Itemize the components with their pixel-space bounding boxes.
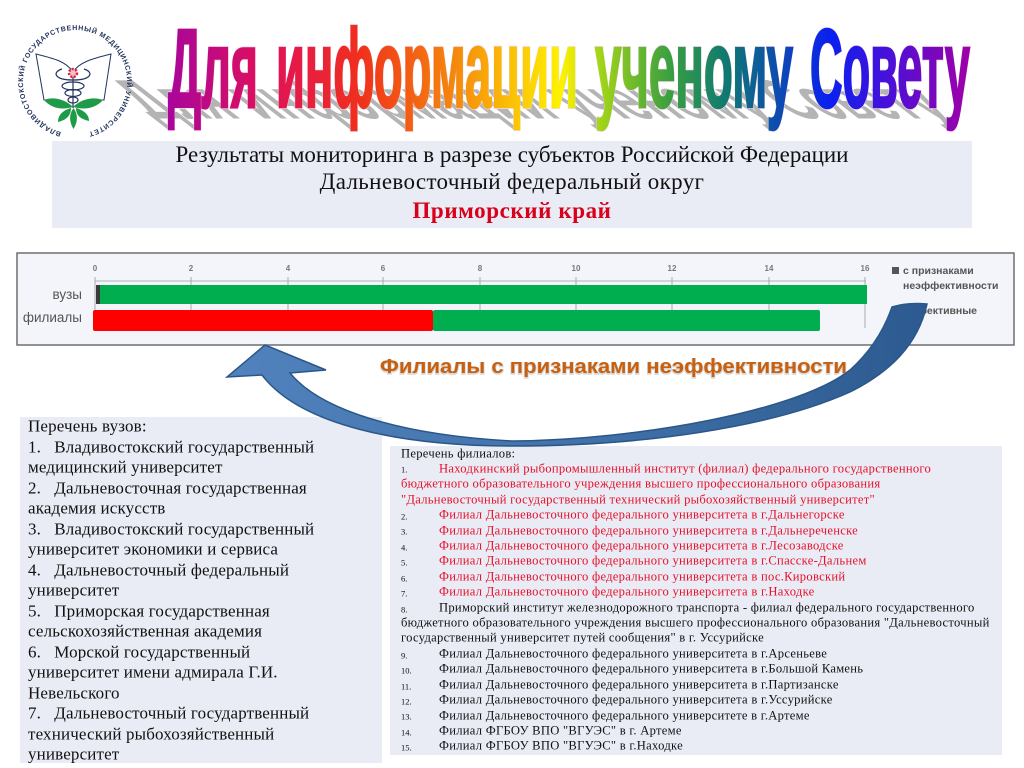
panel: list of branches: Филиал Дальневосточного федерального университета в г.Находке — [439, 584, 815, 598]
panel: list of branches: Филиал Дальневосточного федерального университета в г.Лесозаводске — [439, 538, 844, 552]
panel: list of branches: Филиал Дальневосточного федерального университета в пос.Кировский — [439, 570, 845, 584]
legend — [892, 265, 998, 317]
subtitle: Филиалы с признаками неэффективности — [380, 356, 847, 378]
panel: list of branches: 10. — [401, 666, 412, 676]
title wordart: Для — [168, 7, 258, 131]
panel: list of branches: 6. — [401, 574, 407, 584]
subtitle: Филиалы с признаками неэффективности — [380, 357, 847, 379]
axis tick labels: 16 — [861, 264, 870, 273]
panel: list of branches: бюджетного образовательного учреждения высшего профессионального образования "Дальневосточный — [401, 616, 990, 630]
header line 2: Дальневосточный федеральный округ — [320, 169, 704, 194]
bar: филиалы — [93, 310, 820, 331]
header panel — [52, 141, 972, 228]
panel: list of universities: 5. Приморская государственная — [28, 602, 270, 620]
panel: list of branches: 3. — [401, 526, 407, 536]
panel: list of branches: Филиал Дальневосточного федерального университета в г.Большой Камень — [439, 662, 863, 676]
panel: list of branches: Филиал Дальневосточного федерального университета в г.Арсеньеве — [439, 646, 827, 660]
panel: list of branches: Находкинский рыбопромышленный институт (филиал) федерального государственного — [439, 462, 931, 476]
panel: list of branches: Филиал Дальневосточного федерального университете в г.Артеме — [439, 708, 810, 722]
panel: list of universities: университет имени адмирала Г.И. — [28, 662, 278, 682]
panel: list of branches: 14. — [401, 728, 412, 738]
panel: list of branches: Филиал Дальневосточного федерального университета в г.Дальнереченске — [439, 524, 858, 538]
panel: list of branches: 2. — [401, 512, 407, 522]
panel: list of branches: 15. — [401, 742, 412, 752]
panel: list of universities: 6. Морской государственный — [28, 642, 250, 662]
panel: list of universities: 1. Владивостокский государственный — [28, 438, 314, 456]
panel: list of branches: Филиал Дальневосточного федерального университета в г.Дальнегорске — [439, 508, 845, 522]
logo leaves — [44, 98, 103, 129]
title wordart: информации — [197, 69, 579, 131]
bar chart panel — [16, 252, 1015, 346]
logo book — [36, 54, 111, 100]
panel: list of universities: 7. Дальневосточный государтвенный — [28, 704, 309, 722]
panel: list of branches: 12. — [401, 696, 412, 706]
panel: list of universities: 3. Владивостокский государственный — [28, 520, 314, 538]
legend: неэффективности — [903, 280, 998, 292]
panel: list of branches: Филиал ФГБОУ ВПО "ВГУЭС" в г. Артеме — [439, 724, 682, 738]
panel: list of universities: академия искусств — [28, 498, 165, 518]
logo red ornament — [69, 69, 77, 77]
panel: list of branches: Филиал Дальневосточного федерального университета в г.Партизанске — [439, 678, 839, 692]
legend: эффективные — [903, 305, 977, 317]
panel: list of branches: бюджетного образовательного учреждения высшего профессионального образования — [401, 476, 880, 490]
panel: list of branches: 11. — [401, 682, 411, 692]
panel: list of universities: 2. Дальневосточная государственная — [28, 478, 307, 498]
panel: list of universities: медицинский университет — [28, 458, 223, 476]
panel: list of branches: Приморский институт железнодорожного транспорта - филиал федерального государственного — [439, 600, 975, 614]
axis tick labels: 8 — [478, 264, 483, 273]
logo ring text: ВЛАДИВОСТОКСКИЙ ГОСУДАРСТВЕННЫЙ МЕДИЦИНСКИЙ УНИВЕРСИТЕТ — [18, 25, 134, 137]
title wordart: информации — [276, 7, 578, 131]
panel: list of universities: технический рыбохозяйственный — [28, 724, 274, 744]
panel: list of universities: университет — [28, 744, 119, 764]
category labels: филиалы — [23, 310, 82, 325]
axis tick labels: 6 — [381, 264, 386, 273]
axis tick labels: 0 — [93, 264, 98, 273]
panel: list of universities: 4. Дальневосточный федеральный — [28, 560, 289, 580]
axis tick labels — [93, 264, 870, 273]
category labels: вузы — [52, 287, 82, 302]
panel: list of branches: государственный университет путей сообщения" в г. Уссурийске — [401, 630, 764, 644]
title wordart: Для — [89, 69, 259, 131]
panel: list of branches: 5. — [401, 558, 407, 568]
logo caduceus — [56, 69, 90, 108]
axis tick labels: 12 — [668, 264, 677, 273]
bar: вузы — [96, 285, 867, 304]
axis tick labels: 2 — [189, 264, 194, 273]
panel: list of universities: университет — [28, 580, 119, 600]
panel: list of branches — [390, 446, 1002, 755]
panel: list of branches: 13. — [401, 712, 412, 722]
panel: list of branches: 8. — [401, 604, 407, 614]
header line 1: Результаты мониторинга в разрезе субъектов Российской Федерации — [175, 142, 848, 167]
panel: list of branches: 9. — [401, 650, 407, 660]
panel: list of branches: "Дальневосточный государственный технический рыбохозяйственный университет" — [401, 492, 875, 506]
header line 3: region: Приморский край — [412, 198, 612, 223]
panel: list of universities — [20, 417, 382, 763]
panel: list of branches: Филиал Дальневосточного федерального университета в г.Спасске-Дальнем — [439, 554, 867, 568]
panel: list of branches: Перечень филиалов: — [401, 446, 515, 460]
panel: list of universities: сельскохозяйственная академия — [28, 622, 262, 640]
axis tick labels: 4 — [286, 264, 291, 273]
legend: с признаками — [903, 265, 974, 277]
panel: list of branches: 7. — [401, 588, 407, 598]
panel: list of universities: Невельского — [28, 684, 120, 702]
panel: list of branches: 1. — [401, 464, 407, 474]
axis tick labels: 10 — [572, 264, 581, 273]
panel: list of branches: 4. — [401, 542, 407, 552]
panel: list of branches: Филиал Дальневосточного федерального университета в г.Уссурийске — [439, 692, 833, 706]
title wordart: Для — [168, 7, 258, 131]
logo — [18, 25, 134, 137]
category labels — [23, 287, 82, 325]
axis tick labels: 14 — [765, 264, 774, 273]
title wordart: информации — [276, 7, 578, 131]
panel: list of universities: Перечень вузов: — [28, 416, 147, 436]
panel: list of branches: Филиал ФГБОУ ВПО "ВГУЭС" в г.Находке — [439, 738, 683, 752]
panel: list of universities: университет экономики и сервиса — [28, 540, 278, 558]
